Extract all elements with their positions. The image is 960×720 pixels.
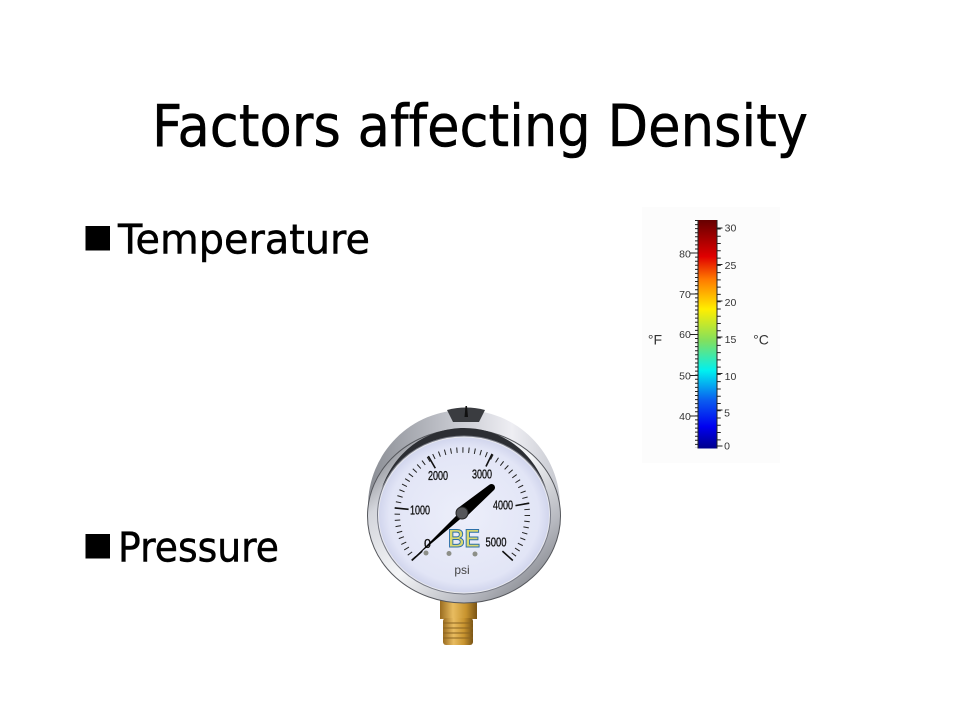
Celsius labels: 10: [725, 371, 736, 383]
maker logo: BE: [448, 525, 480, 553]
Celsius labels: 30: [725, 222, 736, 234]
dial numbers: 1000: [410, 504, 430, 518]
Celsius labels: 0: [724, 440, 730, 452]
unit labels: °F: [648, 332, 662, 348]
unit labels: °C: [753, 332, 769, 348]
Celsius labels: [724, 222, 736, 452]
needle: [413, 484, 495, 559]
colour bar: [698, 220, 717, 448]
brass fitting: [440, 600, 477, 645]
major ticks: [395, 454, 529, 561]
dial numbers: [410, 468, 513, 551]
Celsius labels: 25: [725, 260, 736, 272]
Fahrenheit labels: 80: [679, 248, 691, 260]
housing: [368, 410, 560, 602]
bullet: Temperature: Temperature: [117, 216, 370, 264]
Fahrenheit labels: [679, 248, 691, 423]
unit labels: [648, 332, 769, 348]
top plug: [447, 406, 485, 422]
bullet: Pressure: Pressure: [118, 524, 279, 572]
screws: [424, 550, 478, 556]
dial numbers: 4000: [493, 498, 513, 512]
Celsius labels: 20: [725, 297, 736, 309]
Fahrenheit labels: 70: [679, 289, 691, 301]
dial face: [379, 438, 549, 592]
chrome bezel: [368, 429, 560, 603]
icon: temperature colour scale: [642, 207, 780, 463]
dial numbers: 2000: [428, 469, 448, 483]
dial numbers: 3000: [472, 468, 492, 482]
unit label: psi: [454, 563, 470, 577]
Celsius labels: 5: [724, 408, 730, 420]
Celsius labels: 15: [725, 334, 736, 346]
Fahrenheit labels: 50: [679, 370, 691, 382]
title: Factors affecting Density: [152, 93, 808, 160]
top shadow of the bezel: [382, 428, 546, 488]
Fahrenheit labels: 40: [679, 411, 691, 423]
minor ticks: [397, 450, 527, 558]
icon: pressure gauge: [368, 406, 560, 645]
Fahrenheit labels: 60: [679, 329, 691, 341]
dial numbers: 5000: [486, 536, 507, 550]
scale ticks: [690, 220, 722, 448]
dial numbers: 0: [424, 537, 431, 551]
